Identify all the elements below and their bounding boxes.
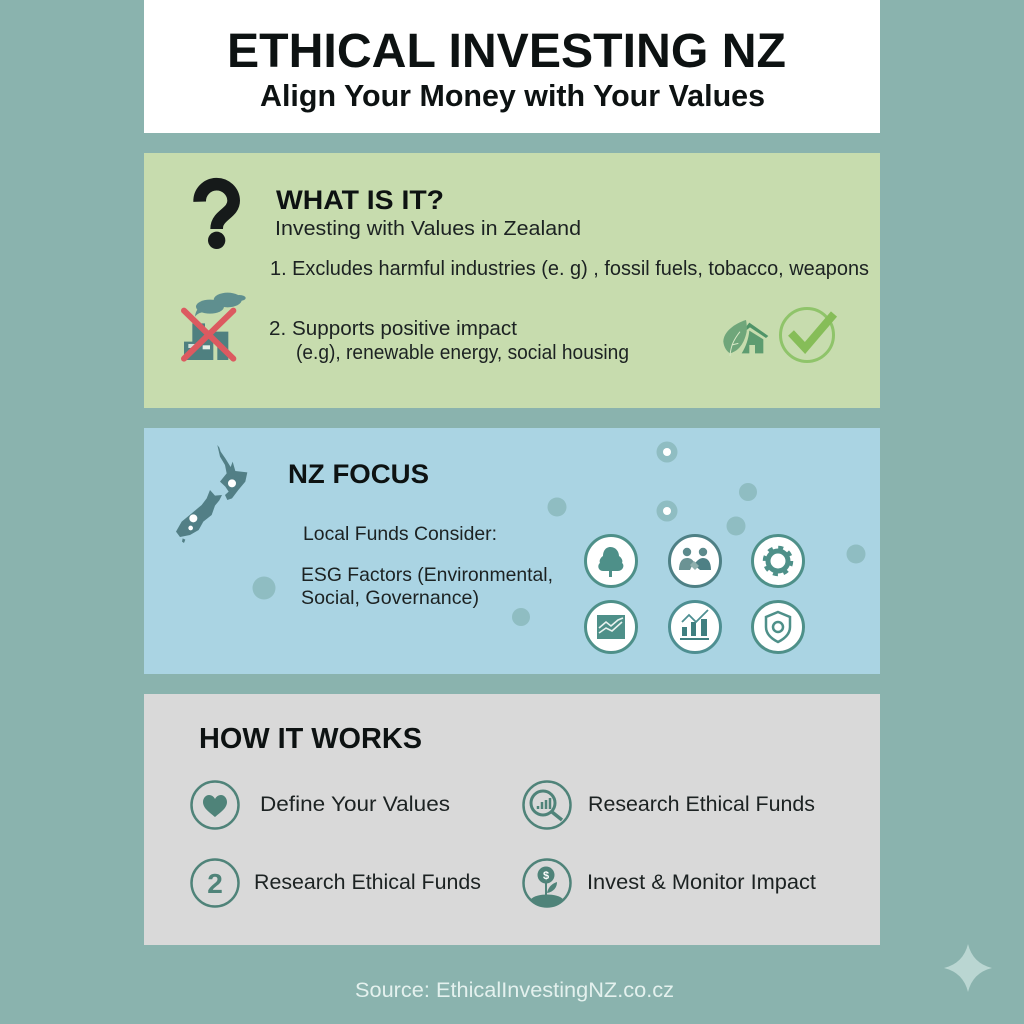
icon: people handshake [670, 536, 720, 586]
text: ESG line 2: Social, Governance) [301, 587, 479, 609]
icon: question mark [200, 184, 234, 249]
heading: how it works: HOW IT WORKS [199, 723, 422, 755]
icon: bar chart [670, 602, 720, 652]
icon: shield [752, 602, 804, 652]
icon: number 2: 2 [207, 868, 223, 899]
text: point 2 examples: (e.g), renewable energy, social housing [296, 342, 629, 364]
text: step 2 left: Research Ethical Funds [254, 871, 481, 894]
decorative network dots [252, 442, 866, 626]
icon: leaf and house [723, 320, 768, 356]
title: ETHICAL INVESTING NZ [227, 25, 786, 78]
source line: Source: EthicalInvestingNZ.co.cz [355, 979, 674, 1002]
heading: what is it: WHAT IS IT? [276, 185, 444, 215]
icon: money plant [524, 860, 570, 906]
icon: money plant: $ [543, 870, 549, 882]
icon: number 2 [192, 860, 238, 906]
icon: crossed-out factory [184, 293, 246, 360]
text: point 2: 2. Supports positive impact [269, 318, 517, 340]
icon: heart [192, 782, 238, 828]
panel: how it works [144, 694, 880, 945]
icon: sparkle [944, 944, 992, 992]
icon: tree [586, 536, 636, 586]
subtitle: Align Your Money with Your Values [260, 78, 765, 113]
text: intro: Investing with Values in Zealand [275, 218, 581, 240]
heading: NZ focus: NZ FOCUS [288, 459, 429, 489]
icon: green check in circle [780, 308, 834, 362]
icon: gear [752, 536, 804, 586]
text: ESG line 1: ESG Factors (Environmental, [301, 564, 553, 586]
map: New Zealand [176, 445, 247, 543]
icon: chart panel [586, 602, 636, 652]
icon: magnifier chart [524, 782, 570, 828]
text: step 4: Invest & Monitor Impact [587, 871, 816, 894]
panel: what is it [144, 153, 880, 408]
text: step 2 right: Research Ethical Funds [588, 793, 815, 816]
panel: title banner [144, 0, 880, 133]
text: point 1: 1. Excludes harmful industries (e. g) , fossil fuels, tobacco, weapons [270, 258, 869, 280]
panel: NZ focus [144, 428, 880, 674]
text: local funds: Local Funds Consider: [303, 524, 497, 545]
text: step 1: Define Your Values [260, 793, 450, 816]
